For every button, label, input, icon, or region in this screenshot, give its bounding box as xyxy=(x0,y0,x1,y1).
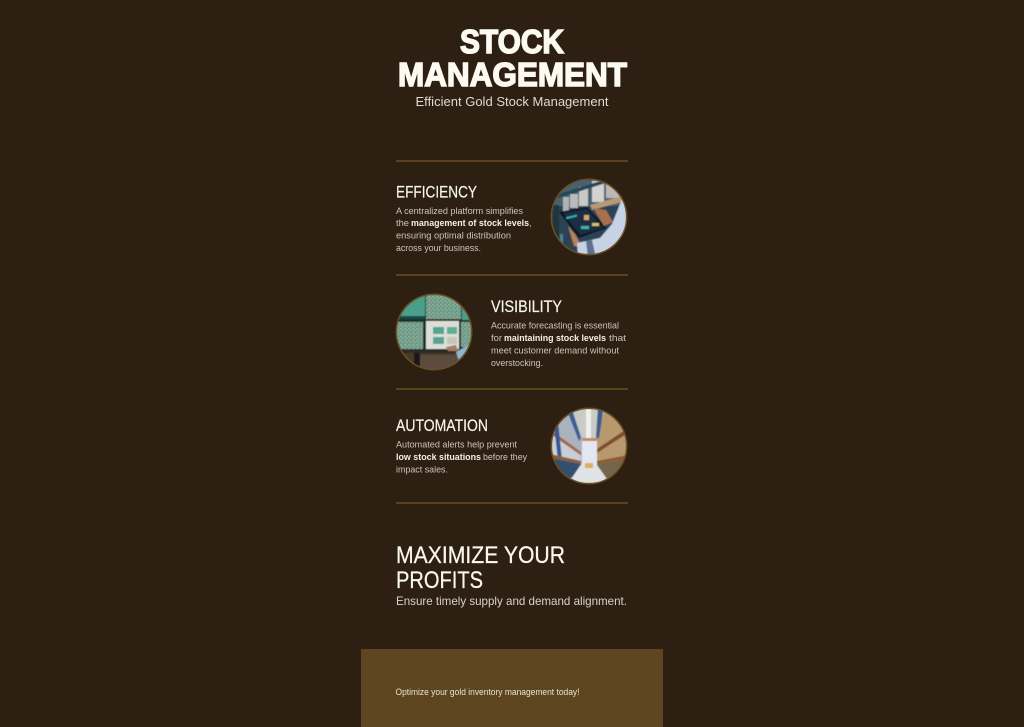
icon: warehouse tablet photo xyxy=(550,178,628,256)
heading: efficiency: EFFICIENCY xyxy=(396,184,477,202)
title: MANAGEMENT xyxy=(398,56,627,93)
divider 3 xyxy=(396,388,628,390)
heading: maximize your profits xyxy=(396,542,565,594)
subtitle: Efficient Gold Stock Management xyxy=(416,95,609,109)
text block: efficiency xyxy=(396,205,532,253)
text block: visibility xyxy=(491,320,626,368)
heading: maximize your profits: PROFITS xyxy=(396,567,483,594)
heading: maximize your profits: MAXIMIZE YOUR xyxy=(396,542,565,569)
title xyxy=(398,23,627,93)
panel: efficiency xyxy=(396,176,630,258)
text block: visibility: Accurate forecasting is essential xyxy=(491,320,619,330)
text block: visibility: for xyxy=(491,332,502,343)
divider 2 xyxy=(396,274,628,276)
text block: efficiency: ensuring optimal distribution xyxy=(396,230,511,240)
panel: visibility xyxy=(394,291,626,373)
divider 1 xyxy=(396,160,628,162)
panel: automation xyxy=(396,405,630,487)
tagline: Ensure timely supply and demand alignment. xyxy=(396,595,627,608)
text block: automation: Automated alerts help prevent xyxy=(396,438,517,450)
icon: monitoring screens photo xyxy=(394,291,474,373)
panel: call to action xyxy=(361,649,663,727)
text block: visibility: that xyxy=(609,332,626,343)
call to action text: Optimize your gold inventory management today! xyxy=(396,687,580,697)
heading: automation: AUTOMATION xyxy=(396,417,488,435)
title: STOCK xyxy=(460,23,564,60)
divider 4 xyxy=(396,502,628,504)
text block: efficiency: A centralized platform simplifies xyxy=(396,205,523,216)
text block: automation xyxy=(396,438,527,474)
text block: efficiency: across your business. xyxy=(396,242,481,253)
text block: efficiency: management of stock levels xyxy=(411,217,529,228)
text block: efficiency: , xyxy=(529,217,532,228)
icon: warehouse aisle photo xyxy=(550,408,628,484)
text block: visibility: meet customer demand without xyxy=(491,344,619,356)
heading: visibility: VISIBILITY xyxy=(491,298,562,316)
text block: efficiency: the xyxy=(396,217,409,228)
text block: automation: low stock situations xyxy=(396,451,481,462)
text block: automation: before they xyxy=(483,451,527,462)
text block: visibility: maintaining stock levels xyxy=(504,332,606,343)
text block: visibility: overstocking. xyxy=(491,357,543,368)
text block: automation: impact sales. xyxy=(396,464,448,474)
